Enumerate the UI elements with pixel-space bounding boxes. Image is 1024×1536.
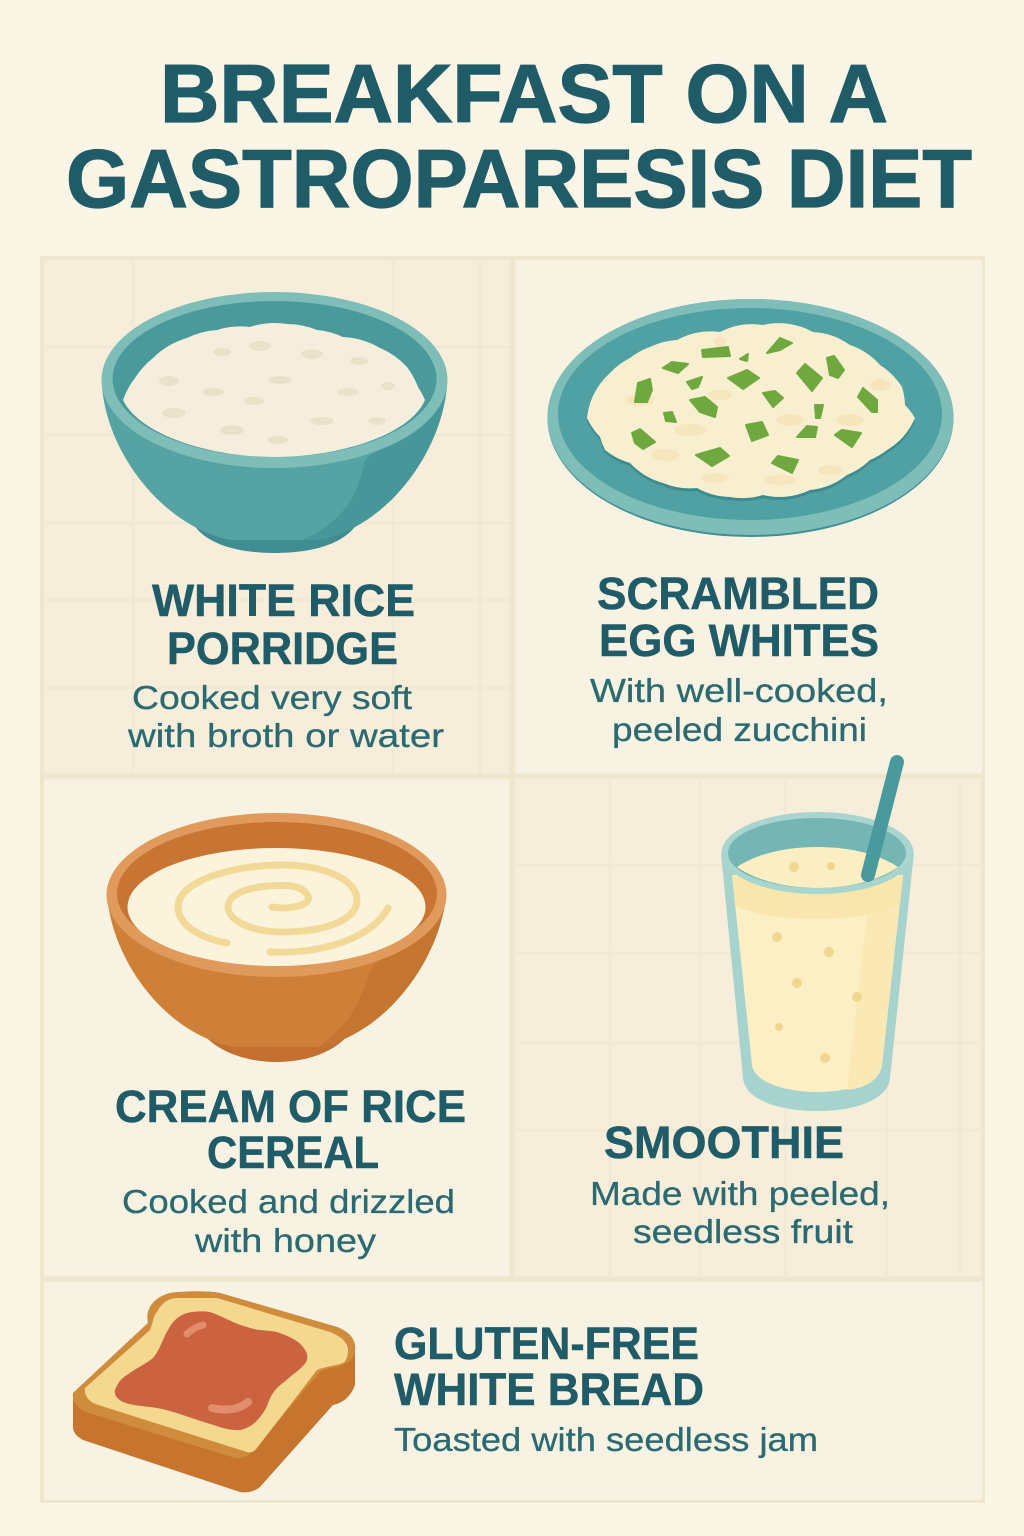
description: Toasted with seedless jam: [394, 1421, 818, 1458]
title: GASTROPARESIS DIET: [66, 132, 972, 225]
panel: smoothie: [590, 762, 914, 1250]
description: [127, 679, 444, 754]
heading: [394, 1318, 704, 1415]
panel: gluten-free white bread: [73, 1291, 818, 1492]
heading: CEREAL: [207, 1127, 379, 1178]
title: BREAKFAST ON A: [160, 47, 888, 140]
description: Cooked and drizzled: [122, 1183, 455, 1220]
description: peeled zucchini: [612, 711, 867, 748]
panel: white rice porridge: [102, 292, 448, 754]
description: [590, 1175, 890, 1250]
heading: [115, 1081, 466, 1178]
heading: EGG WHITES: [599, 615, 879, 666]
heading: WHITE RICE: [152, 575, 415, 626]
description: With well-cooked,: [590, 672, 888, 709]
icon: toast with jam: [73, 1291, 355, 1492]
heading: [152, 575, 415, 674]
heading: PORRIDGE: [167, 623, 398, 674]
description: Cooked very soft: [132, 679, 412, 716]
icon: plate with scrambled eggs: [548, 299, 954, 537]
description: [590, 672, 888, 748]
heading: [597, 568, 879, 666]
panel grid background: [42, 258, 983, 1501]
icon: orange bowl with swirl: [106, 813, 446, 1062]
heading: SMOOTHIE: [604, 1117, 844, 1168]
icon: teal bowl with porridge: [102, 292, 448, 553]
description: Made with peeled,: [590, 1175, 890, 1212]
title: [66, 47, 972, 225]
heading: CREAM OF RICE: [115, 1081, 466, 1132]
description: with honey: [194, 1222, 377, 1259]
heading: GLUTEN-FREE: [394, 1318, 699, 1369]
heading: SCRAMBLED: [597, 568, 879, 619]
icon: glass with straw: [721, 762, 914, 1111]
heading: WHITE BREAD: [394, 1364, 704, 1415]
description: with broth or water: [127, 717, 444, 754]
panel: cream of rice cereal: [106, 813, 466, 1259]
description: seedless fruit: [633, 1213, 853, 1250]
panel: scrambled egg whites: [548, 299, 954, 748]
description: [122, 1183, 455, 1259]
